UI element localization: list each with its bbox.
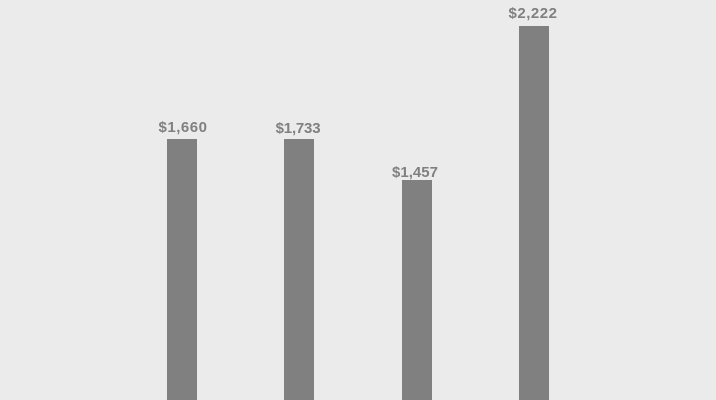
bar: $1,457 xyxy=(402,180,432,400)
value label: $1,457: $1,457 xyxy=(392,164,438,181)
bar: $1,733 xyxy=(284,139,314,400)
value label: $1,660: $1,660 xyxy=(159,119,207,136)
bar: $2,222 xyxy=(519,26,549,400)
bar group: $2,222 xyxy=(508,5,557,400)
bar group: $1,660 xyxy=(158,119,207,400)
bar group: $1,457 xyxy=(392,164,438,400)
bar group: $1,733 xyxy=(276,120,320,400)
value label: $2,222: $2,222 xyxy=(509,5,557,22)
bar: $1,660 xyxy=(167,139,197,400)
value label: $1,733: $1,733 xyxy=(276,120,320,137)
